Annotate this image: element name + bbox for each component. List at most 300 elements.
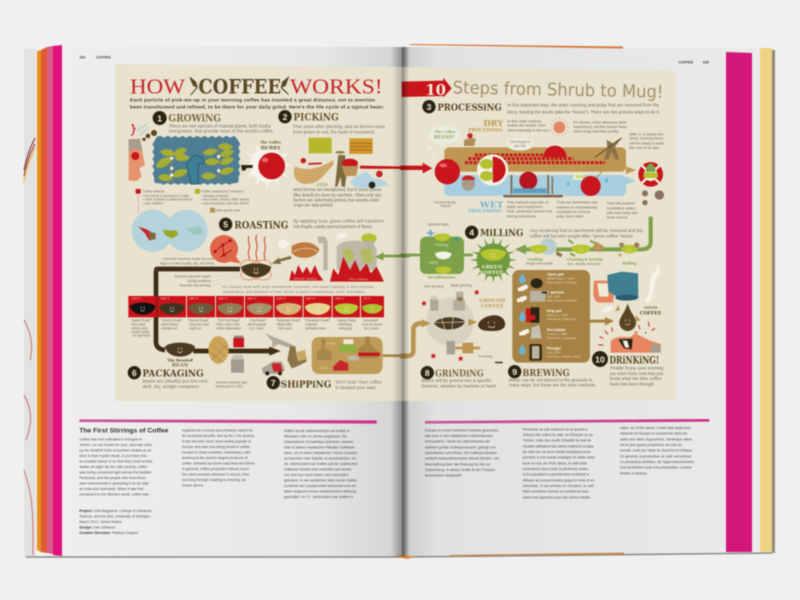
roast labels: first crack <box>278 326 292 330</box>
column 2: it had become much more widely popular in <box>182 439 251 443</box>
heading: 8 grinding <box>421 366 497 388</box>
german column: das man in den städtischen Kaffeehäusern <box>425 434 493 438</box>
german column: weltweit größte Kaffeeproduzent, gefolgt von <box>425 445 496 449</box>
legend: coffee species: • disease-resistant <box>201 194 228 198</box>
roast chart: 135° F <box>335 297 344 301</box>
icon: animal on drying bed <box>464 133 476 146</box>
heading: 1 growing: There are two species of tropical plants, both bushy <box>169 123 272 128</box>
wet processing text: "beans" <box>440 204 452 208</box>
column 3: geschätzt. Im 17. Jahrhundert war Kaffee in <box>284 495 353 499</box>
heading: 6 packaging: 6 <box>132 368 137 378</box>
icon: grinders and cracked bean <box>421 289 480 361</box>
milling steps: size, density, and color <box>567 262 602 266</box>
french column 1: l'Arabie utilisaient des élixirs élaborés à base <box>523 444 594 448</box>
wet processing text <box>427 199 638 226</box>
title: How Coffee Works: HOW <box>130 74 186 98</box>
wet processing text: with less body but <box>607 211 638 215</box>
upper left infographic area <box>129 74 410 213</box>
gutter shadow <box>392 47 409 557</box>
heading: 2 picking: 2 <box>283 112 288 122</box>
column 1: was being consumed right across the Arabian <box>79 471 152 475</box>
heading: 2 picking: Five years after planting, and as berries ripen <box>293 124 386 129</box>
german column: Zubereitung. In dieser Grafik ist der Prozess <box>425 468 495 472</box>
column 1: by the Shadhili Sufis of southern Arabia as an <box>79 449 152 453</box>
title: How Coffee Works: COFFEE <box>198 74 281 98</box>
dry processing text: dried naturally in the sun. <box>507 128 550 132</box>
panel: brewing methods: Plunger <box>547 347 562 351</box>
arrow: tan path into grinding <box>400 323 422 356</box>
french column 2: En général, la production du café suit partout <box>620 454 691 458</box>
roast labels: "French Roast" <box>161 318 182 322</box>
column 3: von dort aus nach Indien und Indonesien <box>284 473 349 477</box>
heading: 8 grinding: 8 <box>425 368 430 378</box>
wet processing text: This method uses lots of <box>507 201 549 205</box>
dry processing text: After 2–4 weeks the <box>629 132 663 136</box>
roast labels <box>131 318 383 338</box>
project credits: March 2012, United States <box>79 520 122 524</box>
text: picking details: Most berries are handpicked, but in some places <box>293 187 382 192</box>
heading: 7 shipping: SHiPPiNG <box>281 380 331 391</box>
roast labels: "Cinnamon Roast" <box>304 318 330 322</box>
arrow: berry into processing <box>400 163 432 173</box>
heading: 9 brewing: BREWiNG <box>522 369 570 379</box>
heading: 1 growing: 1 <box>157 113 162 123</box>
roast labels: for espresso <box>133 334 150 338</box>
roast chart: 475° F <box>132 297 141 301</box>
icon: shipping scene <box>262 333 307 375</box>
column 3: Äthiopien oder im Jemen angebaut. Der <box>284 434 348 438</box>
heading: 10 drinking: DRiNKiNG! <box>609 356 659 367</box>
column 3 <box>284 429 358 499</box>
page header right: COFFEE <box>678 60 694 64</box>
page header left <box>79 55 111 59</box>
legend: coffee species: Coffee arabica <box>143 190 164 194</box>
page header left: 334 <box>79 55 86 59</box>
icon: picking scene: 2224 <box>317 182 328 188</box>
wet processing text: This will produce <box>607 202 635 206</box>
french column 1: Personne ne sait vraiment où et quand a <box>523 427 587 431</box>
french column 1: Yémen, mais des soufis Shadhili du sud de <box>523 439 591 443</box>
panel: optional steps: Decaffeination <box>428 276 456 280</box>
icon: liquid coffee drop: LIQUID <box>644 306 658 310</box>
french column 1: était considéré comme un produit de luxe, <box>523 490 589 494</box>
roast labels: •Surface oil <box>161 326 177 330</box>
german column: Südostasien und Afrika. Die Kaffeeproduktion <box>425 451 497 455</box>
heading: 7 shipping <box>267 376 382 391</box>
heading: 7 shipping: Don't fear! Your coffee <box>336 379 382 384</box>
divider rule <box>425 419 709 424</box>
column 3: allem aufgrund seiner medizinischen Wirkung <box>284 489 356 493</box>
page header right <box>678 60 709 64</box>
left page block stripes <box>37 45 62 556</box>
wet processing text: washed or mechanically <box>557 205 598 209</box>
french column 2: monde, suivi par l'Asie du Sud-Est et l'Afrique. <box>620 449 693 453</box>
legend: coffee species: Both grown here <box>216 209 241 213</box>
milling steps: Grading <box>527 257 543 261</box>
heading: 10 drinking: 10 <box>595 354 605 364</box>
roast chart: 440° F <box>161 297 170 301</box>
icon: green coffee burst <box>470 237 517 283</box>
roasting notes: Chemical reactions inside the bean <box>163 257 214 261</box>
heading: 4 milling: coffee will become sought-after "green coffee" beans. <box>530 233 634 238</box>
roast labels: •Second crack <box>189 323 210 327</box>
column 1: were instrumental in spreading it as far east <box>79 482 149 486</box>
wet processing text: PROCESSING <box>468 208 502 214</box>
green path from hulling <box>515 217 651 254</box>
heading: 1 growing <box>153 111 274 134</box>
heading: 9 brewing: 9 <box>512 367 517 377</box>
icon: green coffee burst: GREEN <box>482 264 503 270</box>
roast labels: •Very dark <box>131 323 146 327</box>
panel: global shipping <box>312 337 410 374</box>
french column 1: d'abord été cultivé le café, en Éthiopie ou au <box>523 432 593 437</box>
column 1: an ecstatic trance or so that they could remain <box>79 460 153 464</box>
roasting notes: Temperature and duration of heat impact a bean's consistency, color, and flavor. <box>222 290 366 294</box>
roast labels: "American Roast" <box>276 318 301 322</box>
german column: anschaulich dargestellt. <box>425 474 462 478</box>
callout: the coffee beans: The Coffee <box>435 130 456 134</box>
heading: 10 drinking: know what the little coffee <box>610 376 662 381</box>
roast labels: •Often bittersweet <box>216 326 241 330</box>
roast labels: •Right after <box>277 323 292 327</box>
column 3: dete in seinen mystischen Ritualen Kaffeeeli- <box>284 445 356 449</box>
roast chart: 70° F <box>363 297 371 301</box>
heading: 9 brewing: Water can be introduced to the grounds in <box>509 377 593 382</box>
left page <box>62 46 402 557</box>
grinding labels: GROUND <box>479 298 506 304</box>
roast chart: 425° F <box>247 297 256 301</box>
panel: brewing methods: Drip pot <box>547 309 562 313</box>
roast chart: 430° F <box>189 297 198 301</box>
panel: global shipping: Coffee <box>327 342 336 346</box>
heading: 5 roasting: 5 <box>223 220 228 230</box>
column 2: houses in urban societies. Nowadays, Latin <box>182 450 251 454</box>
roasting notes: It's usually done with large commercial machines, but home roasting is also possible. <box>222 285 375 289</box>
heading: 5 roasting: By applying heat, green coffee will transform <box>293 219 385 224</box>
page header left: COFFEE <box>96 55 111 59</box>
wet processing text: First, underripe berries rise <box>507 210 552 214</box>
heading: 2 picking <box>278 110 386 134</box>
right page <box>402 47 772 557</box>
icon: red coffee berry <box>435 159 460 184</box>
french column 1: Indonésie. À son arrivée en Occident, le café <box>523 484 594 488</box>
grinding labels: Pounding <box>478 354 493 358</box>
icon: molecule bubble <box>210 235 241 263</box>
french column 2: répandu en Europe et consommé dans les <box>620 432 688 436</box>
roast chart: 390° F <box>306 297 315 301</box>
wet processing text: water and equipment. <box>507 205 543 209</box>
milling steps: Hulling <box>622 262 637 266</box>
heading: 6 packaging: Beans are (ideally) put into cool, <box>143 379 208 384</box>
heading: 5 roasting: ROASTiNG <box>234 220 288 231</box>
column 3: gebracht. In der westlichen Welt wurde Kaffee <box>284 478 357 482</box>
heading: the first stirrings: The First Stirrings of Coffee <box>79 428 169 435</box>
heading: 6 packaging: dark, dry, airtight containers. <box>143 384 200 389</box>
french column 1: toute la nuit. Au XVIe siècle, le café était <box>523 461 587 465</box>
title: How Coffee Works: WORKS! <box>290 74 383 98</box>
panel: brewing methods: Espresso <box>547 291 565 295</box>
heading: 10 drinking: Finally! Enjoy your morning <box>610 366 664 371</box>
german column <box>425 428 499 478</box>
project credits: Creative Direction: Patricia Claydon <box>79 531 138 535</box>
column 1: Coffee was first cultivated in Ethiopia or <box>79 438 143 442</box>
dry processing bar: turn me! <box>514 144 526 148</box>
roasting notes: Acidity weakens <box>187 279 211 283</box>
roast labels: Unroasted <box>363 318 378 322</box>
heading: 3 processing: PROCESSiNG <box>437 103 502 113</box>
panel: brewing methods: Full Flavor, Medium Body <box>547 355 581 359</box>
intro text <box>130 98 384 111</box>
dry processing text: beans are sorted, then <box>507 124 546 128</box>
roast chart <box>128 296 384 317</box>
dry processing text: DRY <box>483 118 504 128</box>
wet processing text: more aroma. <box>607 216 628 220</box>
roast chart: 410° F <box>218 297 227 301</box>
column 3: 16. Jahrhundert war Kaffee auf der arabischen <box>284 462 358 466</box>
wet processing text: scrubbed to remove <box>557 210 591 214</box>
heading: 4 milling: 4 <box>469 228 474 238</box>
panel: coffee plants <box>154 137 239 184</box>
roast labels: U.S. roast <box>249 326 263 330</box>
wet processing text: They are fermented and <box>557 201 598 205</box>
wet processing text: Optional steps <box>427 222 449 226</box>
column 1: introduced to the Western world, coffee was <box>79 493 149 497</box>
french column 2 <box>620 426 694 475</box>
panel: brewing methods: Italy, 1901 <box>547 295 561 299</box>
heading: 9 brewing <box>508 365 596 388</box>
french column 1: et la population a grandement contribué à <box>523 473 589 477</box>
roast labels: •Rich, even color <box>216 323 240 327</box>
column 3: xiere, um in einen ekstatische Trance-Zustand <box>284 451 357 455</box>
column 2: its medicinal benefits. But by the 17th century, <box>182 434 255 438</box>
roasting notes <box>160 257 375 294</box>
legend: coffee species: • less acidic, smoky, bitter aroma <box>201 198 249 202</box>
panel: brewing methods <box>512 270 614 363</box>
heading: 7 shipping: is headed your way! <box>336 385 376 390</box>
heading: 3 processing <box>422 100 660 115</box>
icon: green coffee burst: COFFEE <box>480 270 504 276</box>
dry processing bar: Don't forget to <box>510 140 530 144</box>
method icons <box>526 278 551 361</box>
column 2: coffee, followed by South-east Asia and Africa. <box>182 461 256 465</box>
project credits: Science, and the Arts, University of Michigan, <box>79 514 151 518</box>
french column 2: illustré ci-dessus. <box>620 471 647 475</box>
roast labels: •Yellowing, <box>337 323 353 327</box>
icon: drinking face <box>598 322 661 353</box>
icon: berry cross section <box>477 154 508 186</box>
french column 2: nales. Au XVIIe siècle, il était déjà largement <box>620 426 691 430</box>
milling steps <box>526 238 639 266</box>
french column 1 <box>523 427 595 499</box>
french column 1: avant tout apprécié pour ses vertus médici- <box>523 495 592 499</box>
book cover edge <box>24 49 36 557</box>
panel: brewing methods: Full Flavor, Light Body <box>547 336 577 340</box>
roast labels: enlarging <box>339 326 352 330</box>
panel: brewing methods: Percolator <box>547 328 566 332</box>
icon: coffee berry starburst: BERRY <box>261 145 281 151</box>
heading: 3 processing: berry, leaving the seeds (aka the "beans"). There are two primary ways to do it: <box>507 110 660 115</box>
french column 2: un processus similaire, de l'approvisionnement <box>620 460 694 464</box>
dry processing text: In this older method, <box>507 119 542 123</box>
icon: drum roaster: Drum roasting <box>349 277 368 281</box>
heading: 10 drinking <box>592 351 664 386</box>
lower right infographic area <box>400 217 664 388</box>
panel: brewing methods: Bitter Flavor, Full Body <box>547 280 578 284</box>
roasting notes: Aromatic oils develop <box>179 283 211 287</box>
german column: Beschaffung über die Röstung bis hin zur <box>425 462 491 466</box>
icon: home roasting pot <box>278 237 328 281</box>
milling steps: Cleaning & Sorting <box>567 258 603 262</box>
wet processing bar <box>444 172 636 197</box>
lower left infographic area <box>128 210 410 391</box>
icon: ground coffee pile <box>468 315 505 331</box>
intro text: been transformed and refined, to be there for your daily grind. Here's the life cycle of a typical bean: <box>130 105 384 111</box>
column 2: shown above. <box>182 483 204 487</box>
panel: brewing methods: Middle East, c. 1600 <box>547 277 574 281</box>
roast labels: Drying Phase <box>337 318 357 322</box>
heading: 1 growing: GROWiNG <box>168 114 221 125</box>
roast labels: for 2 years <box>364 326 379 330</box>
callout: the coffee beans: BEANS* <box>434 134 455 140</box>
dry processing text <box>468 118 664 150</box>
column 2: America is the world's largest producer of <box>182 456 248 460</box>
dry processing text: PROCESSING <box>468 127 503 133</box>
panel: brewing methods: France, c. 1750 <box>547 313 568 317</box>
roast labels: •Used mostly <box>131 330 150 334</box>
intro text: Each particle of pick-me-up in your morning coffee has traveled a great distance, not to mention <box>130 98 375 104</box>
divider rule <box>79 419 377 424</box>
dry processing text: the rest of its skin. <box>629 146 660 150</box>
column 1: awake all night. By the 16th century, coffee <box>79 465 147 469</box>
french column 1: de café lors de leurs rituels mystiques pour <box>523 450 591 454</box>
heading: 1 growing: evergreens, that provide most of the world's coffee. <box>169 129 274 134</box>
roast labels: drinkable bean <box>305 326 326 330</box>
legend: coffee species: • and processed until late 1800's <box>201 202 249 206</box>
dry processing text: expensive), but the beans have <box>573 125 627 129</box>
icon: sack, jar and bag <box>208 336 244 373</box>
heading: 8 grinding: GRiNDiNG <box>435 369 484 379</box>
german column: Europa zu einem beliebten Getränk geworden, <box>425 428 499 432</box>
heading: 6 packaging: Vacuum-packing was <box>216 381 247 385</box>
column 1: Peninsula, and the people who lived there <box>79 476 146 480</box>
roast labels: •Burnt flavor <box>161 323 178 327</box>
milling steps: weight and quality <box>526 261 553 265</box>
article: left page <box>79 419 377 535</box>
heading: 5 roasting: into fragile, easily opened packets of flavor. <box>293 224 373 229</box>
panel: brewing methods: Open pot <box>547 273 565 277</box>
roast labels: "Vienna Roast" <box>188 318 209 322</box>
heading: 4 milling: MiLLiNG <box>480 229 523 239</box>
panel: global shipping: Stores <box>320 366 329 370</box>
icon: liquid coffee drop: COFFEE <box>640 311 662 317</box>
column 2: regarded as a luxury and primarily valued for <box>182 428 254 432</box>
text: picking details: crops are strip-picked. <box>293 203 333 208</box>
wet processing text: WET <box>479 199 503 209</box>
panel: brewing methods: Full Flavor, Light Body <box>547 317 577 321</box>
column 2: sourcing through roasting to brewing, as <box>182 478 246 482</box>
text: picking details: (like Brazil) it's done by machine. Often only ripe <box>293 192 382 197</box>
german column: konsumierte. Heute ist Lateinamerika der <box>425 440 491 444</box>
column 2: the same process wherever it occurs, from <box>182 472 249 476</box>
dry processing bar <box>444 137 636 174</box>
roast labels: "Full City Roast" <box>217 318 240 322</box>
map: coffee regions <box>132 210 208 252</box>
icon: coffee berry starburst: The Coffee <box>260 141 282 145</box>
heading: 5 roasting <box>219 218 385 231</box>
right page block stripes <box>726 48 775 553</box>
callout: the coffee beans <box>427 126 460 157</box>
icon: sun <box>551 119 568 136</box>
heading: 7 shipping: 7 <box>271 378 276 388</box>
column 3: Kaffee wurde wahrscheinlich als erstes in <box>284 429 350 433</box>
heading: 10 drinking: joe even more now that you <box>609 371 664 376</box>
french column 2: est le plus grand producteur de café au <box>620 443 682 447</box>
icon: liquid coffee drop <box>615 303 662 331</box>
panel: optional steps: Aging <box>429 260 438 264</box>
icon: drum roaster <box>330 232 410 282</box>
column 3: zu kommen oder Nächte zu durchwachen. Im <box>284 456 356 460</box>
roast labels: "Italian Roast" <box>131 318 151 322</box>
icon: coffee berry starburst <box>241 139 293 191</box>
roasted bean: The Roasted <box>167 358 193 362</box>
heading: 3 processing: In this important step, the outer covering and pulpy fruit are removed from the <box>507 102 660 107</box>
french column 2: à la torréfaction puis à la préparation, comme <box>620 466 692 470</box>
panel: optional steps <box>400 229 473 280</box>
column 1 <box>79 438 153 497</box>
german column: verläuft erstaunlicherweise überall ähnlich, von <box>425 457 499 461</box>
legend: coffee species <box>136 189 249 213</box>
panel: brewing methods: Bitter Flavor, Full Body <box>547 299 578 303</box>
title: 10 steps from shrub to mug: 10 <box>425 81 446 99</box>
column 1: elixir in their mystic rituals, to put them into <box>79 454 147 458</box>
heading: 6 packaging: introduced in 1931 <box>216 385 243 389</box>
heading: 3 processing: 3 <box>427 102 432 112</box>
icon: heat waves and roasting bean <box>157 235 292 284</box>
column 3: zunächst als Luxusprodukt betrachtet und vor <box>284 484 357 488</box>
column 2: Europe and was now being drunk in coffee- <box>182 445 252 449</box>
heading: 4 milling <box>465 226 644 239</box>
french column 1: consommé dans toute la péninsule arabe, <box>523 467 589 471</box>
project credits: Design: Dan Zettwoch <box>79 525 116 529</box>
page header right: 335 <box>703 60 709 64</box>
wet processing text: pulp, then dried. <box>557 215 584 219</box>
legend: coffee species: • two-thirds of all beans in trade <box>143 194 189 198</box>
roast labels: •Lightest <box>305 323 318 327</box>
icon: home roasting pot: Wok-like roasting <box>294 276 317 280</box>
icon: hulled bean flower <box>638 162 664 205</box>
wet processing bar: Burp <box>576 174 586 179</box>
heading: 2 picking: from green to red, the bush is harvested. <box>293 129 375 134</box>
dry processing text: more body and less acidity. <box>573 129 619 133</box>
french column 1: diffuser sa consommation jusqu'en Inde et en <box>523 478 595 482</box>
project credits <box>79 509 153 535</box>
legend: coffee species: • more complex & balanced flavor <box>143 198 193 202</box>
icon: thinking farmer face <box>129 124 157 181</box>
wet processing text: during immersion. <box>507 214 537 218</box>
heading: 8 grinding: fineness, whether by machine or hand. <box>422 383 497 388</box>
roast labels: •Light oil <box>189 326 201 330</box>
column 1: as India and Indonesia. When it was first <box>79 487 144 491</box>
roast labels: "City Roast" <box>249 318 266 322</box>
heading: 6 packaging: PACKAGiNG <box>142 369 204 380</box>
panel: optional steps: Polishing <box>435 243 449 247</box>
roast labels: •Shiny w/oil <box>131 326 147 330</box>
grinding labels: Burr grinding <box>424 284 444 288</box>
heading: 9 brewing: many ways, but these are the main methods. <box>509 383 596 388</box>
heading: 6 packaging <box>128 366 247 389</box>
upper right infographic area <box>400 78 664 226</box>
paper panel right <box>402 67 676 401</box>
